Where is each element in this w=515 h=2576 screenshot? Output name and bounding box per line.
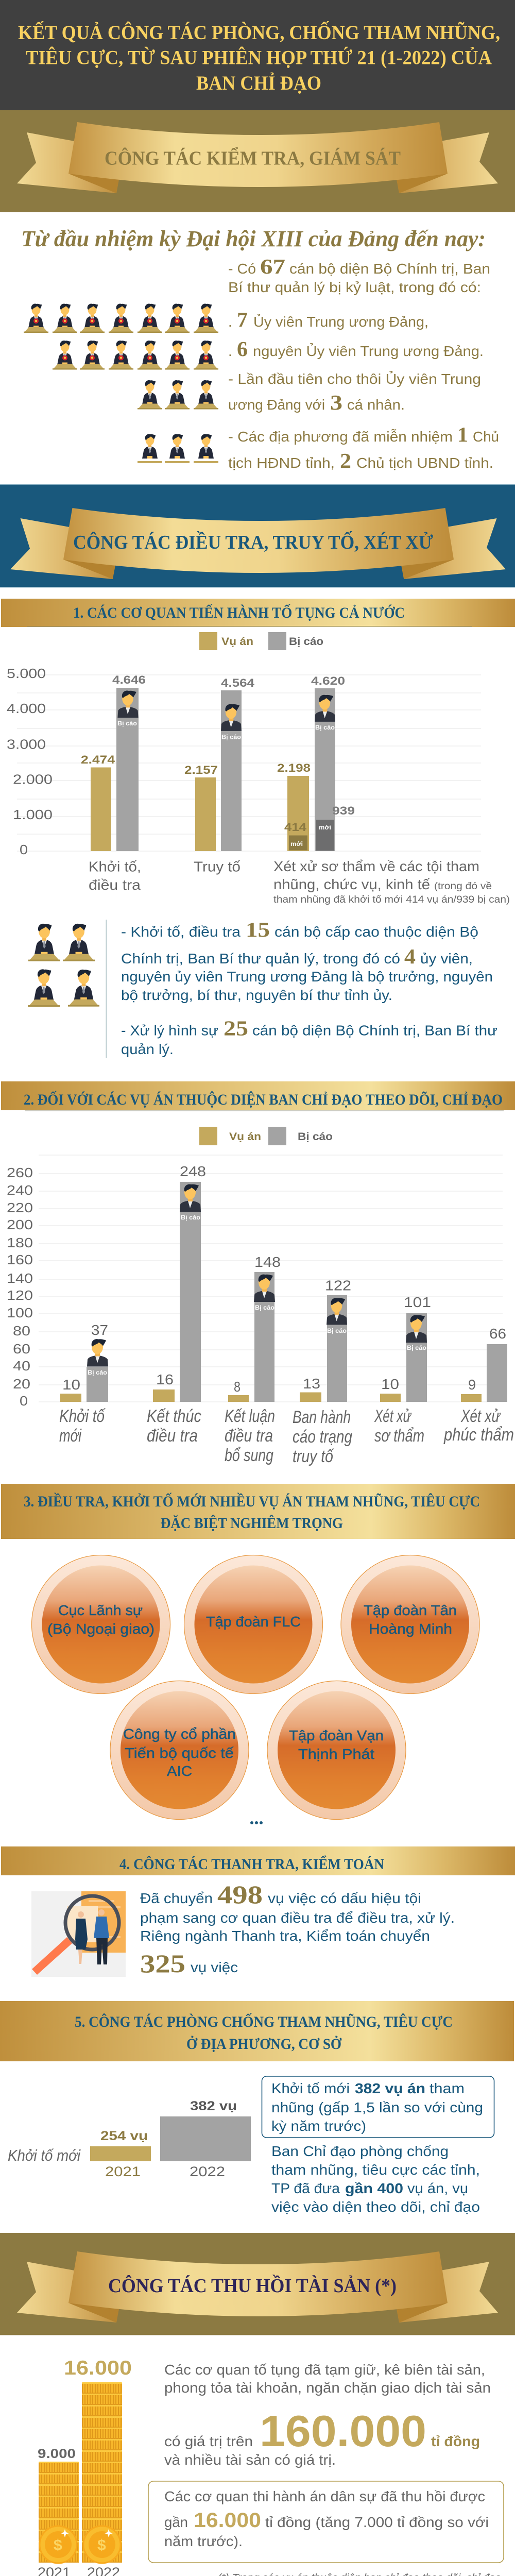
bars: khởi tố mới: 37	[91, 1322, 108, 1338]
y axis labels: 260	[7, 1165, 33, 1180]
callout: khởi tố mới 382 vụ án: nhũng (gấp 1,5 lần so với cùng	[271, 2099, 483, 2115]
text block: tạm giữ, kê biên tài sản: phong tỏa tài khoản, ngăn chặn giao dịch tài sản	[164, 2380, 491, 2396]
oval: Công ty cổ phần Tiến bộ quốc tế AIC: AIC	[167, 1763, 192, 1779]
bars: ban hành cáo trạng: 122	[325, 1278, 351, 1293]
legend chart 1: Bị cáo	[289, 636, 323, 648]
bars: ban hành cáo trạng: Bị cáo	[327, 1327, 347, 1334]
bars: xét xử sơ thẩm: Bị cáo	[315, 724, 335, 731]
bars: ban hành cáo trạng: 13	[303, 1376, 320, 1392]
chart: khởi tố mới 2021 vs 2022	[8, 2099, 251, 2179]
subheading: từ đầu nhiệm kỳ: Từ đầu nhiệm kỳ Đại hội XIII của Đảng đến nay:	[21, 226, 486, 251]
section bar 3: vụ án đặc biệt nghiêm trọng	[1, 1484, 515, 1539]
section bar 3: vụ án đặc biệt nghiêm trọng: 3. ĐIỀU TRA, KHỞI TỐ MỚI NHIỀU VỤ ÁN THAM NHŨNG, TIÊU CỰC	[24, 1493, 480, 1510]
icons: people pictogram rows	[24, 303, 218, 463]
text block: thanh tra, kiểm toán: phạm sang cơ quan điều tra để điều tra, xử lý.	[140, 1910, 455, 1926]
bars: khởi tố mới: 10	[62, 1377, 80, 1393]
x axis labels: Xét xử sơ thẩm về các tội tham	[273, 858, 479, 874]
discipline statistics text: Chủ	[473, 429, 499, 445]
y axis labels: 200	[7, 1217, 33, 1232]
callout: khởi tố mới 382 vụ án: kỳ năm trước)	[271, 2118, 366, 2134]
oval: Công ty cổ phần Tiến bộ quốc tế AIC: Tiến bộ quốc tế	[125, 1745, 234, 1761]
discipline statistics text: 7	[237, 308, 248, 331]
bar chart: vụ án Ban Chỉ đạo theo dõi	[7, 1155, 514, 1466]
y axis labels: 160	[7, 1252, 33, 1267]
oval: Tập đoàn Vạn Thịnh Phát	[267, 1681, 406, 1820]
y axis labels: 4.000	[7, 701, 46, 716]
discipline statistics text: Ủy viên Trung ương Đảng,	[253, 313, 428, 330]
bars: xét xử sơ thẩm: 414	[284, 821, 307, 834]
bars: kết thúc điều tra: 248	[180, 1163, 206, 1179]
discipline statistics text: 2	[340, 449, 351, 472]
discipline statistics text: - Có	[228, 261, 256, 277]
text block: thanh tra, kiểm toán: vụ việc	[191, 1959, 238, 1975]
discipline statistics text: 1	[457, 422, 468, 446]
y axis labels: 1.000	[13, 807, 53, 822]
legend chart 2: Vụ án	[229, 1131, 261, 1143]
callout: thi hành án dân sự: năm trước).	[164, 2533, 243, 2549]
text block: thanh tra, kiểm toán: Đã chuyển	[140, 1890, 213, 1906]
text block: xử lý cán bộ cấp cao: ủy viên,	[420, 951, 473, 967]
bars: kết luận điều tra bổ sung: 8	[234, 1379, 241, 1395]
y axis labels: 3.000	[7, 737, 46, 752]
bars: ban hành cáo trạng	[300, 1278, 351, 1402]
callout: thi hành án dân sự: Các cơ quan thi hành án dân sự đã thu hồi được	[164, 2488, 485, 2504]
text block: xử lý cán bộ cấp cao: Chính trị, Ban Bí thư quản lý, trong đó có	[121, 951, 400, 967]
text block: xử lý cán bộ cấp cao: - Khởi tố, điều tra	[121, 924, 241, 940]
x axis labels: điều tra	[147, 1426, 198, 1446]
bars: xét xử sơ thẩm: Bị cáo	[407, 1344, 426, 1351]
x axis labels: Kết thúc	[147, 1406, 201, 1426]
y axis labels: 60	[13, 1341, 30, 1357]
legend chart 1: Vụ án	[221, 636, 253, 648]
callout: thi hành án dân sự: gần	[164, 2514, 188, 2530]
section bar 4: thanh tra, kiểm toán: 4. CÔNG TÁC THANH TRA, KIỂM TOÁN	[119, 1856, 384, 1873]
y axis labels: 100	[7, 1305, 33, 1320]
discipline statistics text: - Lần đầu tiên cho thôi Ủy viên Trung	[228, 370, 481, 387]
bars: kết luận điều tra bổ sung: 148	[254, 1254, 281, 1270]
y axis labels	[7, 666, 53, 857]
chart: khởi tố mới 2021 vs 2022: 254 vụ	[100, 2129, 148, 2143]
text block: ban chỉ đạo cấp tỉnh: Ban Chỉ đạo phòng chống	[271, 2143, 449, 2159]
x axis labels: Khởi tố,	[89, 858, 141, 875]
oval: Cục Lãnh sự: (Bộ Ngoại giao)	[47, 1621, 154, 1637]
bars: xét xử sơ thẩm: 4.620	[311, 674, 345, 687]
section bar 1: các cơ quan tiến hành tố tụng	[1, 599, 515, 627]
x axis labels: Xét xử	[374, 1406, 412, 1426]
discipline statistics text: 67	[260, 255, 285, 278]
discipline statistics text: .	[228, 343, 232, 359]
header: title	[0, 0, 515, 110]
discipline statistics text: - Các địa phương đã miễn nhiệm	[228, 429, 453, 445]
bars: khởi tố, điều tra: 4.646	[112, 673, 146, 686]
bars: truy tố	[184, 676, 255, 851]
coin stack 2021	[39, 2462, 79, 2563]
x axis labels: sơ thẩm	[374, 1426, 424, 1446]
x axis labels: Kết luận	[225, 1406, 275, 1426]
y axis labels: 5.000	[7, 666, 46, 681]
y axis labels: 0	[20, 842, 28, 857]
text block: tạm giữ, kê biên tài sản: Các cơ quan tố tụng đã tạm giữ, kê biên tài sản,	[164, 2362, 485, 2378]
discipline statistics text	[228, 255, 499, 472]
text block: ban chỉ đạo cấp tỉnh: tham nhũng, tiêu cực các tỉnh,	[271, 2162, 480, 2178]
legend chart 2	[199, 1127, 333, 1145]
oval: Tập đoàn Tân Hoàng Minh: Hoàng Minh	[369, 1621, 452, 1637]
x axis labels	[59, 1406, 514, 1466]
coin chart: thu hồi tài sản 2021, 2022: 16.000	[64, 2357, 132, 2379]
oval: Tập đoàn Tân Hoàng Minh: Tập đoàn Tân	[364, 1602, 457, 1618]
discipline statistics text: cán bộ diện Bộ Chính trị, Ban	[289, 261, 490, 277]
oval: Tập đoàn Vạn Thịnh Phát: Thịnh Phát	[298, 1746, 374, 1762]
chart: khởi tố mới 2021 vs 2022: 2022	[190, 2164, 225, 2179]
text block: thanh tra, kiểm toán	[140, 1880, 455, 1978]
text block: tạm giữ, kê biên tài sản	[164, 2362, 491, 2468]
bars: xét xử sơ thẩm: 10	[381, 1376, 399, 1392]
y axis labels: 180	[7, 1235, 33, 1250]
bar chart: các cơ quan tố tụng	[7, 666, 510, 905]
text block: tạm giữ, kê biên tài sản: có giá trị trên	[164, 2433, 253, 2449]
text block: thanh tra, kiểm toán: Riêng ngành Thanh tra, Kiểm toán chuyển	[140, 1928, 430, 1944]
text block: xử lý cán bộ cấp cao	[106, 918, 497, 1058]
section banner: công tác kiểm tra, giám sát	[0, 110, 515, 212]
chart: khởi tố mới 2021 vs 2022: Khởi tố mới	[8, 2146, 81, 2164]
illustration: magnifier and two people	[31, 1891, 126, 1977]
text block: xử lý cán bộ cấp cao: quản lý.	[121, 1041, 174, 1057]
x axis labels: điều tra	[89, 877, 141, 893]
section bar 4: thanh tra, kiểm toán	[1, 1846, 515, 1875]
coin stack 2021: $	[54, 2537, 62, 2554]
oval: Tập đoàn Vạn Thịnh Phát: Tập đoàn Vạn	[289, 1727, 384, 1743]
text block: thanh tra, kiểm toán: 325	[140, 1949, 185, 1978]
text block: tạm giữ, kê biên tài sản: tỉ đồng	[431, 2433, 480, 2449]
x axis labels: tham nhũng đã khởi tố mới 414 vụ án/939 bị can)	[273, 894, 510, 905]
x axis labels: Ban hành	[293, 1408, 351, 1427]
text block: thanh tra, kiểm toán: vụ việc có dấu hiệu tội	[268, 1890, 421, 1906]
oval: Công ty cổ phần Tiến bộ quốc tế AIC: Công ty cổ phần	[123, 1726, 236, 1742]
section bar 5: địa phương, cơ sở: 5. CÔNG TÁC PHÒNG CHỐNG THAM NHŨNG, TIÊU CỰC	[75, 2013, 453, 2030]
discipline statistics text: nguyên Ủy viên Trung ương Đảng.	[253, 343, 484, 359]
discipline statistics text: tịch HĐND tỉnh,	[228, 455, 335, 471]
bars: kết luận điều tra bổ sung: Bị cáo	[255, 1304, 274, 1311]
callout: khởi tố mới 382 vụ án	[262, 2076, 494, 2138]
bars: xét xử sơ thẩm: 939	[332, 804, 355, 817]
text block: xử lý cán bộ cấp cao: cán bộ cấp cao thuộc diện Bộ	[274, 924, 478, 940]
text block: xử lý cán bộ cấp cao: 15	[246, 918, 270, 941]
bars: xét xử sơ thẩm: 2.198	[277, 761, 311, 774]
section banner: công tác kiểm tra, giám sát: CÔNG TÁC KIỂM TRA, GIÁM SÁT	[105, 147, 401, 169]
callout: thi hành án dân sự	[148, 2481, 504, 2563]
text block: thanh tra, kiểm toán: 498	[217, 1880, 263, 1909]
bars: khởi tố mới: Bị cáo	[88, 1369, 107, 1376]
title text: TIÊU CỰC, TỪ SAU PHIÊN HỌP THỨ 21 (1-2022) CỦA	[26, 46, 492, 69]
title text: BAN CHỈ ĐẠO	[196, 72, 321, 94]
text block: tạm giữ, kê biên tài sản: 160.000	[260, 2407, 426, 2456]
callout: khởi tố mới 382 vụ án: tham	[430, 2080, 465, 2096]
section bar 3: vụ án đặc biệt nghiêm trọng: ĐẶC BIỆT NGHIÊM TRỌNG	[161, 1515, 343, 1532]
legend chart 1	[199, 632, 323, 650]
bars: xét xử sơ thẩm	[277, 674, 355, 851]
x axis labels: Xét xử	[460, 1406, 501, 1426]
discipline statistics text: .	[228, 314, 232, 330]
legend chart 2: Bị cáo	[298, 1131, 333, 1143]
y axis labels: 120	[7, 1287, 33, 1303]
bars: xét xử phúc thẩm: 9	[468, 1377, 476, 1393]
y axis labels: 20	[13, 1376, 30, 1392]
text block: xử lý cán bộ cấp cao: nguyên ủy viên Trung ương Đảng là bộ trưởng, nguyên	[121, 969, 493, 985]
x axis labels: truy tố	[293, 1447, 335, 1466]
y axis labels: 220	[7, 1200, 33, 1215]
y axis labels: 80	[13, 1323, 30, 1338]
text block: xử lý cán bộ cấp cao: 4	[404, 944, 416, 968]
oval: Tập đoàn FLC: Tập đoàn FLC	[206, 1614, 301, 1630]
text block: ban chỉ đạo cấp tỉnh	[271, 2143, 480, 2215]
callout: thi hành án dân sự: 16.000	[194, 2509, 261, 2532]
y axis labels: 40	[13, 1358, 30, 1374]
section banner: công tác điều tra, truy tố, xét xử	[0, 484, 515, 587]
x axis labels: bổ sung	[225, 1446, 273, 1465]
oval: Cục Lãnh sự: Cục Lãnh sự	[58, 1602, 143, 1618]
ellipsis dots	[250, 1821, 263, 1824]
section bar 5: địa phương, cơ sở	[0, 2001, 514, 2061]
oval: Tập đoàn FLC	[184, 1555, 322, 1694]
x axis labels: Khởi tố	[59, 1406, 106, 1426]
text block: xử lý cán bộ cấp cao: bộ trưởng, bí thư, nguyên bí thư tỉnh ủy.	[121, 987, 392, 1003]
section bar 5: địa phương, cơ sở: Ở ĐỊA PHƯƠNG, CƠ SỞ	[186, 2036, 342, 2053]
bars: khởi tố, điều tra: Bị cáo	[117, 720, 137, 727]
y axis labels	[7, 1165, 33, 1409]
bars: truy tố: 2.157	[184, 764, 218, 776]
text block: xử lý cán bộ cấp cao: - Xử lý hình sự	[121, 1022, 218, 1039]
text block: tạm giữ, kê biên tài sản: và nhiều tài sản có giá trị.	[164, 2452, 336, 2468]
y axis labels: 240	[7, 1182, 33, 1198]
bars: xét xử phúc thẩm	[461, 1326, 507, 1402]
text block: xử lý cán bộ cấp cao: cán bộ diện Bộ Chính trị, Ban Bí thư	[252, 1022, 497, 1039]
section bar 2: vụ án thuộc diện Ban Chỉ đạo	[1, 1081, 515, 1111]
bars: xét xử sơ thẩm: mới	[319, 824, 331, 831]
callout: khởi tố mới 382 vụ án: 382 vụ án	[355, 2080, 425, 2096]
section bar 1: các cơ quan tiến hành tố tụng: 1. CÁC CƠ QUAN TIẾN HÀNH TỐ TỤNG CẢ NƯỚC	[73, 604, 405, 621]
coin stack 2022	[82, 2382, 122, 2563]
discipline statistics text: cá nhân.	[347, 397, 405, 413]
discipline statistics text: Bí thư quản lý bị kỷ luật, trong đó có:	[228, 279, 481, 295]
bars: khởi tố, điều tra: 2.474	[81, 753, 115, 766]
section banner: công tác thu hồi tài sản	[0, 2233, 515, 2335]
text block: ban chỉ đạo cấp tỉnh: TP đã đưa	[271, 2180, 340, 2196]
x axis labels	[89, 858, 510, 905]
chart: khởi tố mới 2021 vs 2022: 2021	[105, 2164, 141, 2179]
discipline statistics text: Chủ tịch UBND tỉnh.	[356, 455, 493, 471]
coin stack 2022: $	[97, 2537, 106, 2554]
bars: xét xử phúc thẩm: 66	[489, 1326, 506, 1342]
bars: xét xử sơ thẩm: mới	[290, 840, 303, 848]
x axis labels: mới	[59, 1426, 82, 1446]
text block: ban chỉ đạo cấp tỉnh: việc vào diện theo dõi, chỉ đạo	[271, 2199, 480, 2215]
oval: Cục Lãnh sự	[32, 1555, 170, 1694]
x axis labels: (trong đó về	[434, 880, 492, 892]
coin chart: thu hồi tài sản 2021, 2022: 9.000	[38, 2447, 76, 2461]
section banner: công tác thu hồi tài sản: CÔNG TÁC THU HỒI TÀI SẢN (*)	[108, 2274, 397, 2297]
bars: xét xử sơ thẩm	[380, 1294, 431, 1402]
bars: khởi tố mới	[60, 1322, 108, 1402]
bars: khởi tố, điều tra	[81, 673, 146, 851]
discipline statistics text: ương Đảng với	[228, 397, 325, 413]
bars: kết thúc điều tra: Bị cáo	[181, 1214, 200, 1221]
x axis labels: Truy tố	[194, 858, 241, 875]
discipline statistics text: 6	[237, 337, 248, 361]
text block: ban chỉ đạo cấp tỉnh: vụ án, vụ	[407, 2180, 468, 2196]
discipline statistics text: 3	[330, 391, 342, 414]
bars: kết thúc điều tra	[153, 1163, 206, 1402]
title text	[18, 20, 500, 94]
oval: Công ty cổ phần Tiến bộ quốc tế AIC	[110, 1681, 249, 1820]
y axis labels: 0	[20, 1393, 28, 1409]
chart: khởi tố mới 2021 vs 2022: 382 vụ	[190, 2099, 237, 2113]
bars: kết luận điều tra bổ sung	[228, 1254, 281, 1402]
bars: truy tố: Bị cáo	[221, 734, 241, 741]
section banner: công tác điều tra, truy tố, xét xử: CÔNG TÁC ĐIỀU TRA, TRUY TỐ, XÉT XỬ	[73, 531, 433, 553]
icons: four officials	[28, 924, 99, 1007]
bars: truy tố: 4.564	[221, 676, 255, 689]
oval: Tập đoàn Tân Hoàng Minh	[341, 1555, 479, 1694]
x axis labels: cáo trạng	[293, 1427, 352, 1447]
y axis labels: 140	[7, 1270, 33, 1286]
x axis labels: điều tra	[225, 1426, 273, 1446]
coin chart: thu hồi tài sản 2021, 2022	[38, 2357, 132, 2576]
y axis labels: 2.000	[13, 772, 53, 787]
text block: ban chỉ đạo cấp tỉnh: gần 400	[345, 2180, 403, 2196]
callout: thi hành án dân sự: tỉ đồng (tăng 7.000 tỉ đồng so với	[265, 2514, 489, 2530]
callout: khởi tố mới 382 vụ án: Khởi tố mới	[271, 2080, 350, 2096]
bars: xét xử sơ thẩm: 101	[404, 1294, 431, 1310]
x axis labels: nhũng, chức vụ, kinh tế	[273, 876, 430, 892]
bars: kết thúc điều tra: 16	[156, 1371, 174, 1387]
text block: xử lý cán bộ cấp cao: 25	[224, 1016, 248, 1040]
